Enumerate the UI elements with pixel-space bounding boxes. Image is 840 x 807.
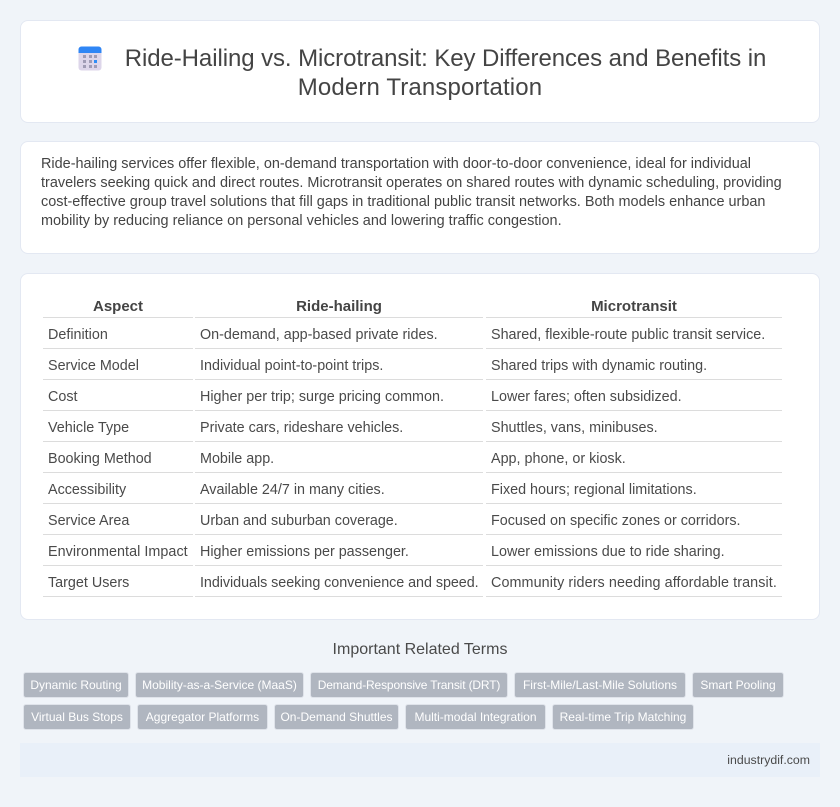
row: accessibility: Accessibility xyxy=(48,482,126,498)
row: environmental impact: Environmental Impact xyxy=(48,544,188,560)
row: cost: Cost xyxy=(48,388,78,404)
row: service model xyxy=(48,358,707,374)
footer source: industrydif.com xyxy=(727,753,810,767)
related term tags: Aggregator Platforms xyxy=(146,710,259,724)
related term tags: Virtual Bus Stops xyxy=(31,710,123,724)
footer bar xyxy=(20,743,820,777)
row: service model: Service Model xyxy=(48,358,139,374)
row: vehicle type xyxy=(48,420,658,436)
row: vehicle type: Vehicle Type xyxy=(48,420,129,436)
row: target users xyxy=(48,574,777,590)
row: target users: Individuals seeking convenience and speed. xyxy=(200,574,479,590)
title: Modern Transportation xyxy=(298,74,542,101)
row: definition: Shared, flexible-route public transit service. xyxy=(491,326,765,342)
row: cost xyxy=(48,388,682,404)
row: service model: Shared trips with dynamic routing. xyxy=(491,358,707,374)
heading: important related terms: Important Related Terms xyxy=(333,641,507,658)
row: service model: Individual point-to-point trips. xyxy=(200,358,383,374)
icon: calendar xyxy=(78,46,102,70)
row: environmental impact: Lower emissions due to ride sharing. xyxy=(491,544,725,560)
row: target users: Target Users xyxy=(48,574,129,590)
table header: Aspect xyxy=(93,298,143,315)
row: service area xyxy=(48,512,741,528)
title: Ride-Hailing vs. Microtransit: Key Differences and Benefits in xyxy=(125,45,766,72)
row: booking method: Mobile app. xyxy=(200,450,274,466)
related term tags xyxy=(23,672,784,730)
row: accessibility xyxy=(48,482,697,498)
panel: introduction xyxy=(20,141,820,254)
related term tags: Mobility-as-a-Service (MaaS) xyxy=(142,678,297,692)
intro text: Ride-hailing services offer flexible, on-demand transportation with door-to-door convenience, ideal for individual xyxy=(41,156,751,172)
related term tags: Real-time Trip Matching xyxy=(560,710,686,724)
row: accessibility: Fixed hours; regional limitations. xyxy=(491,482,697,498)
row: vehicle type: Shuttles, vans, minibuses. xyxy=(491,420,658,436)
related term tags: First-Mile/Last-Mile Solutions xyxy=(523,678,677,692)
related term tags: On-Demand Shuttles xyxy=(280,710,393,724)
related term tags: Demand-Responsive Transit (DRT) xyxy=(318,678,500,692)
table header: Ride-hailing xyxy=(296,298,382,315)
row: service area: Focused on specific zones or corridors. xyxy=(491,512,741,528)
intro text: cost-effective group travel solutions that fill gaps in traditional public transit networks. Both models enhance urban xyxy=(41,194,765,210)
related term tags: Multi-modal Integration xyxy=(414,710,537,724)
header panel xyxy=(20,20,820,123)
title xyxy=(125,45,766,101)
related term tags: Smart Pooling xyxy=(700,678,776,692)
row: definition: On-demand, app-based private rides. xyxy=(200,326,438,342)
row: service area: Service Area xyxy=(48,512,129,528)
row: environmental impact xyxy=(48,544,725,560)
comparison table xyxy=(43,298,782,597)
row: cost: Higher per trip; surge pricing common. xyxy=(200,388,444,404)
row: target users: Community riders needing affordable transit. xyxy=(491,574,777,590)
related term tags: Dynamic Routing xyxy=(30,678,122,692)
row: cost: Lower fares; often subsidized. xyxy=(491,388,682,404)
row: definition: Definition xyxy=(48,326,108,342)
row: definition xyxy=(48,326,765,342)
row: vehicle type: Private cars, rideshare vehicles. xyxy=(200,420,403,436)
table header: Microtransit xyxy=(591,298,677,315)
row: environmental impact: Higher emissions per passenger. xyxy=(200,544,409,560)
row: booking method: Booking Method xyxy=(48,450,152,466)
intro text: mobility by reducing reliance on personal vehicles and lowering traffic congestion. xyxy=(41,213,562,229)
table header xyxy=(93,298,677,315)
row: accessibility: Available 24/7 in many cities. xyxy=(200,482,385,498)
row: service area: Urban and suburban coverage. xyxy=(200,512,398,528)
intro text: travelers seeking quick and direct routes. Microtransit operates on shared routes with dynamic scheduling, providing xyxy=(41,175,782,191)
row: booking method: App, phone, or kiosk. xyxy=(491,450,626,466)
intro text xyxy=(41,156,782,229)
row: booking method xyxy=(48,450,626,466)
panel: comparison table xyxy=(20,273,820,620)
